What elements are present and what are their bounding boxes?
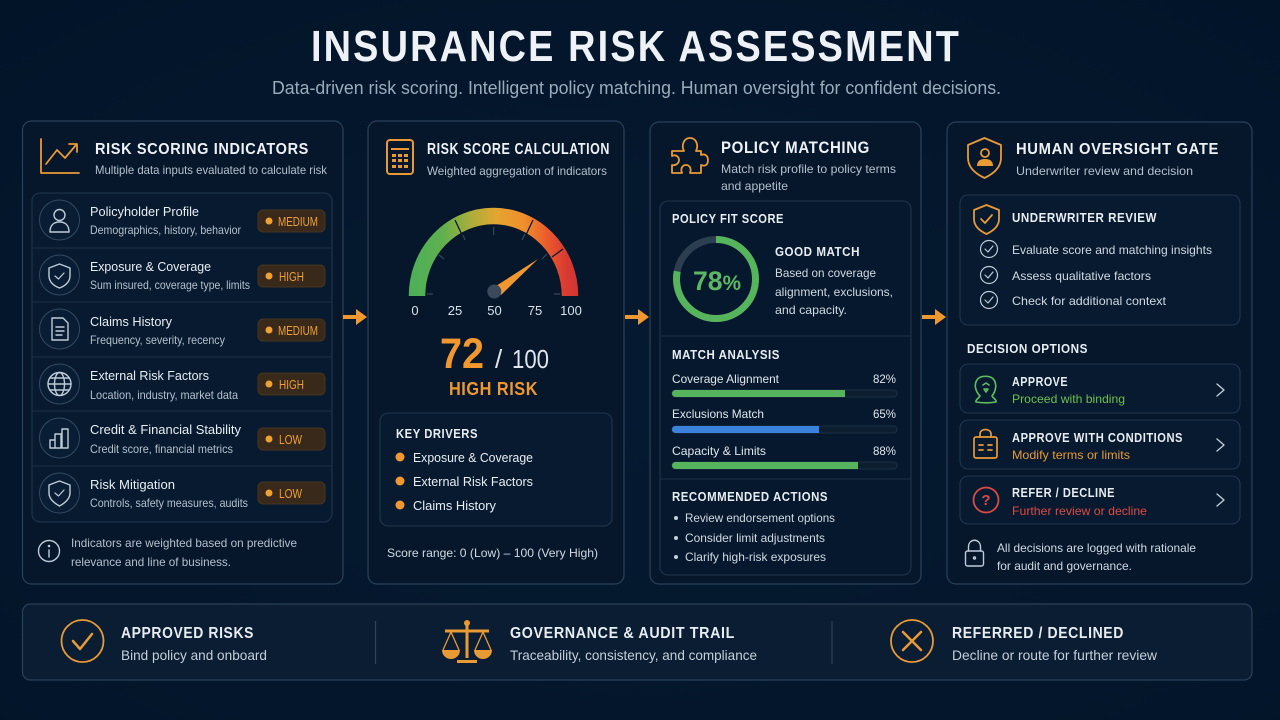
underwriter review box: UNDERWRITER REVIEW — [1012, 210, 1157, 225]
donut chart: 78 percent — [676, 240, 756, 318]
section: recommended actions: Review endorsement options — [685, 511, 835, 525]
option: approve with conditions: APPROVE WITH CONDITIONS — [1012, 430, 1183, 445]
risk level label: HIGH RISK — [449, 378, 538, 399]
bar: capacity and limits: Capacity & Limits — [672, 444, 766, 458]
section: policy fit score: and capacity. — [775, 303, 847, 317]
score value: 100 — [512, 344, 549, 374]
checklist item: Assess qualitative factors — [1012, 269, 1151, 283]
icon: line chart — [41, 139, 79, 173]
panel: risk scoring indicators — [22, 121, 343, 584]
indicator: policyholder profile — [40, 200, 325, 240]
indicator: claims history — [40, 309, 325, 349]
section: match analysis — [672, 347, 897, 469]
arrow: indicators to calculation — [343, 309, 367, 325]
score range note: Score range: 0 (Low) – 100 (Very High) — [387, 546, 598, 560]
option: refer or decline: ? — [981, 492, 991, 509]
bar: capacity and limits — [672, 444, 897, 469]
panel: risk score calculation — [368, 121, 624, 584]
section: policy fit score: GOOD MATCH — [775, 244, 860, 259]
heading: risk scoring indicators: RISK SCORING INDICATORS — [95, 141, 309, 158]
indicator: external risk factors — [40, 364, 325, 404]
outcome: referred or declined: REFERRED / DECLINED — [952, 625, 1124, 642]
heading: risk score calculation: RISK SCORE CALCULATION — [427, 141, 610, 158]
key drivers box — [380, 413, 612, 526]
arrow: matching to oversight — [922, 309, 946, 325]
inner card — [660, 201, 911, 575]
indicator: credit and financial stability: LOW — [279, 433, 302, 447]
icon: info — [38, 540, 60, 562]
checklist item — [980, 292, 1167, 308]
outcome: approved risks — [62, 620, 267, 663]
key drivers box: KEY DRIVERS — [396, 426, 478, 441]
gauge scale labels: 50 — [487, 303, 502, 318]
bar: coverage alignment: 82% — [873, 372, 896, 386]
gauge needle — [487, 259, 538, 298]
heading: policy matching: POLICY MATCHING — [721, 138, 870, 157]
panel description — [721, 162, 896, 193]
audit note: All decisions are logged with rationale — [997, 541, 1196, 555]
indicator: risk mitigation: LOW — [279, 487, 302, 501]
panel description: Multiple data inputs evaluated to calculate risk — [95, 163, 328, 177]
weighting note: Indicators are weighted based on predictive — [71, 536, 297, 550]
option: approve with conditions: Modify terms or limits — [1012, 448, 1130, 462]
checklist item — [980, 266, 1151, 284]
option: approve with conditions — [960, 420, 1240, 469]
panel description: Weighted aggregation of indicators — [427, 164, 607, 178]
weighting note: relevance and line of business. — [71, 555, 231, 569]
indicator: external risk factors: Location, industry, market data — [90, 388, 238, 402]
arrow: calculation to matching — [625, 309, 649, 325]
audit note: for audit and governance. — [997, 559, 1132, 573]
key drivers box: External Risk Factors — [413, 474, 533, 489]
outcome: approved risks: APPROVED RISKS — [121, 625, 254, 642]
panel description: Match risk profile to policy terms — [721, 162, 896, 176]
audit note — [997, 541, 1196, 573]
indicator: credit and financial stability: Credit & Financial Stability — [90, 422, 241, 437]
outcome: governance and audit trail: GOVERNANCE & AUDIT TRAIL — [510, 625, 735, 642]
weighting note — [71, 536, 297, 569]
panel: outcomes bar — [22, 604, 1252, 680]
indicators list — [32, 193, 332, 522]
option: approve: Proceed with binding — [1012, 392, 1125, 406]
bar: exclusions match — [672, 407, 897, 433]
bar: exclusions match: Exclusions Match — [672, 407, 764, 421]
indicator: claims history: MEDIUM — [278, 324, 318, 338]
section: recommended actions — [672, 489, 835, 564]
bar: coverage alignment: Coverage Alignment — [672, 372, 780, 386]
gauge scale labels: 100 — [560, 303, 582, 318]
section: recommended actions: RECOMMENDED ACTIONS — [672, 489, 828, 504]
gauge scale labels — [411, 303, 582, 318]
bar: exclusions match: 65% — [873, 407, 896, 421]
outcome: governance and audit trail — [442, 620, 757, 663]
checklist item: Evaluate score and matching insights — [1012, 243, 1212, 257]
indicator: exposure and coverage: Sum insured, coverage type, limits — [90, 278, 250, 292]
icon: calculator — [387, 140, 413, 174]
indicator: credit and financial stability — [40, 418, 325, 458]
indicator: policyholder profile: Policyholder Profile — [90, 204, 199, 219]
outcome: approved risks: Bind policy and onboard — [121, 647, 267, 663]
indicator: external risk factors: External Risk Factors — [90, 368, 209, 383]
panel: human oversight gate — [947, 122, 1252, 584]
heading: human oversight gate: HUMAN OVERSIGHT GATE — [1016, 141, 1219, 158]
section: recommended actions: Clarify high-risk exposures — [685, 550, 826, 564]
indicator: risk mitigation — [40, 473, 325, 513]
bar: coverage alignment — [672, 372, 897, 397]
icon: shield check — [974, 205, 999, 234]
gauge scale labels: 0 — [411, 303, 419, 318]
indicator: claims history: Claims History — [90, 314, 172, 329]
score value — [440, 330, 549, 378]
panel: policy matching — [650, 122, 921, 584]
key drivers box: Claims History — [413, 498, 496, 513]
section: policy fit score: POLICY FIT SCORE — [672, 211, 784, 226]
score value: 72 — [440, 330, 484, 378]
bar: capacity and limits: 88% — [873, 444, 896, 458]
indicator: exposure and coverage — [40, 255, 325, 295]
section: policy fit score: Based on coverage — [775, 266, 876, 280]
score value: / — [495, 344, 503, 374]
option: refer or decline: REFER / DECLINE — [1012, 485, 1115, 500]
underwriter review box — [960, 195, 1240, 325]
indicator: credit and financial stability: Credit score, financial metrics — [90, 442, 233, 456]
gauge scale labels: 25 — [448, 303, 462, 318]
indicator: external risk factors: HIGH — [279, 378, 304, 392]
gauge chart — [411, 216, 582, 318]
option: refer or decline — [960, 476, 1240, 524]
title: INSURANCE RISK ASSESSMENT — [311, 22, 961, 71]
indicator: policyholder profile: Demographics, history, behavior — [90, 223, 241, 237]
indicator: exposure and coverage: HIGH — [279, 270, 304, 284]
outcome: referred or declined — [891, 620, 1158, 663]
key drivers box: Exposure & Coverage — [413, 450, 533, 465]
indicator: risk mitigation: Risk Mitigation — [90, 477, 175, 492]
section: recommended actions: Consider limit adjustments — [685, 531, 825, 545]
checklist item: Check for additional context — [1012, 294, 1167, 308]
gauge scale labels: 75 — [528, 303, 542, 318]
donut chart: 78 percent: 78% — [693, 266, 741, 296]
indicator: claims history: Frequency, severity, recency — [90, 333, 225, 347]
outcome: governance and audit trail: Traceability, consistency, and compliance — [510, 647, 757, 663]
option: approve: APPROVE — [1012, 374, 1068, 389]
decision options heading: DECISION OPTIONS — [967, 341, 1088, 356]
indicator: policyholder profile: MEDIUM — [278, 215, 318, 229]
panel description: and appetite — [721, 179, 788, 193]
indicator: risk mitigation: Controls, safety measures, audits — [90, 496, 248, 510]
option: approve — [960, 364, 1240, 413]
option: refer or decline: Further review or decline — [1012, 504, 1147, 518]
indicator: exposure and coverage: Exposure & Coverage — [90, 259, 211, 274]
section: match analysis: MATCH ANALYSIS — [672, 347, 780, 362]
outcome: referred or declined: Decline or route for further review — [952, 647, 1158, 663]
section: policy fit score — [672, 211, 893, 318]
section: policy fit score: alignment, exclusions, — [775, 285, 893, 299]
panel description: Underwriter review and decision — [1016, 164, 1193, 178]
icon: shield with person — [968, 138, 1001, 178]
icon: puzzle piece — [672, 138, 708, 173]
subtitle: Data-driven risk scoring. Intelligent policy matching. Human oversight for confident decisions. — [272, 78, 1001, 98]
icon: lock — [966, 540, 984, 566]
